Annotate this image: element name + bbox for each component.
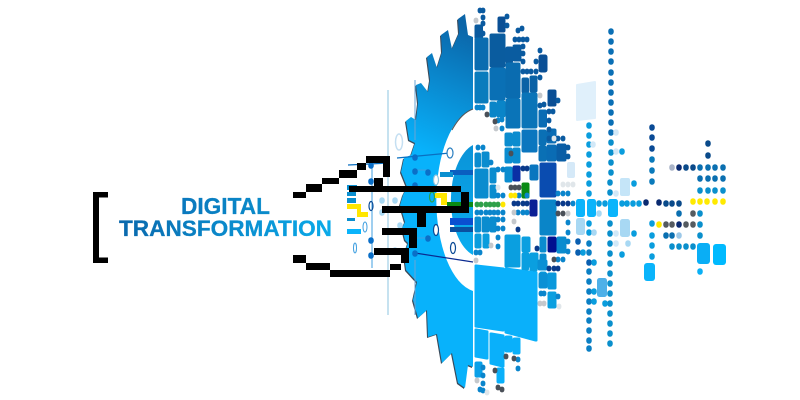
dots: central field [476, 10, 573, 393]
title: Digital Transformation: DIGITAL [181, 193, 270, 219]
left bracket [93, 192, 108, 263]
data squares: lower block [475, 260, 556, 383]
data squares: upper block [475, 17, 566, 161]
dots: right matrix [646, 143, 723, 272]
data squares: right field [567, 82, 726, 297]
circuit lines and nodes [348, 80, 473, 315]
title: Digital Transformation [119, 193, 332, 241]
gear [399, 14, 473, 389]
colored bars [347, 170, 473, 234]
pixel hand outline [293, 156, 469, 277]
data squares: middle block [475, 130, 566, 308]
dots: blue columns [578, 31, 652, 349]
title: Digital Transformation: TRANSFORMATION [119, 216, 332, 241]
